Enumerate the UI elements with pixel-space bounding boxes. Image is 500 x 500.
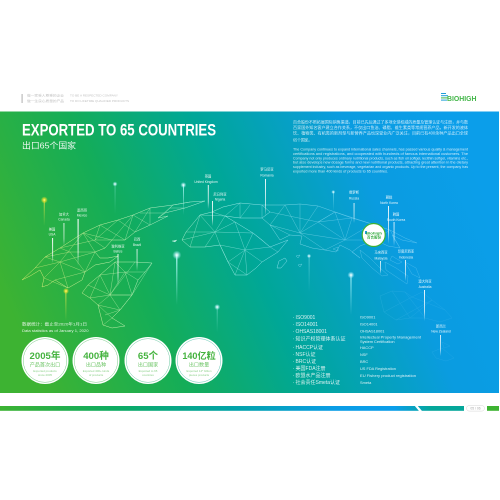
Chinese certifications: · HACCP认证 — [292, 344, 323, 351]
heading: exported to 65 countries — [22, 122, 216, 150]
English certifications: ISO9001 — [360, 314, 375, 320]
stat: 2005: Exported products — [33, 369, 57, 373]
country pins and labels: 加拿大 — [59, 212, 70, 216]
stat: 400: 400种 — [83, 350, 109, 362]
Chinese certifications: · 欧盟水产品注册 — [292, 372, 331, 379]
English certifications: Intellectual Property Management — [360, 335, 422, 340]
country pins and labels: New Zealand — [431, 330, 451, 334]
heading: exported to 65 countries: 出口65个国家 — [22, 140, 77, 150]
stat: 2005: since 2005 — [38, 373, 52, 377]
country pins and labels: Belize — [114, 250, 123, 254]
English certifications: EU Fishery product registration — [360, 373, 416, 378]
header slogan: TO DO LIFETIME QUALIFIED PRODUCTS — [70, 99, 129, 103]
country pins and labels: North Korea — [380, 201, 398, 205]
country pins and labels: Russia — [349, 196, 359, 200]
country pins and labels: United Kingdom — [194, 180, 218, 184]
world map wireframe — [22, 201, 454, 361]
company description: 百合股份不断拓展国际销售渠道，目前已先后通过了多项全球权威的质量及管理认证与注册，并与数 — [293, 118, 468, 124]
page number: 05 / 06 — [470, 407, 481, 411]
Chinese certifications: · OHSAS18001 — [292, 329, 327, 335]
stat: 400: Exported 400+ kinds — [83, 369, 110, 373]
stat: 2005: 2005年 — [30, 350, 61, 362]
country pins and labels: 新西兰 — [436, 324, 447, 328]
company description: supplement industry, such as beverage, vegetarian and organic products. Up to the present, the company has — [293, 165, 468, 169]
South America — [82, 262, 152, 328]
company description: 65个国家。 — [293, 136, 312, 142]
data statistics date: 数据统计：截止至2020年1月1日 — [22, 322, 87, 326]
data statistics date — [22, 322, 89, 333]
country pins and labels: 韩国 — [393, 212, 399, 216]
English certifications: US FDA Registration — [360, 366, 396, 371]
company description: 百家国外知名客户建立合作关系，不仅出口鱼油、磷脂、维生素类等常规营养产品，新开发的液体 — [293, 124, 468, 130]
stat: 65: 65个 — [138, 351, 159, 362]
English certifications: System Certification — [360, 339, 395, 344]
company description — [293, 118, 468, 174]
company description: but also develops new dosage forms and new nutritional products, attracting great attention in the dietary — [293, 161, 468, 165]
heading: exported to 65 countries: EXPORTED TO 65 COUNTRIES — [22, 122, 216, 140]
country pins and labels: 英国 — [205, 174, 211, 178]
certification list — [292, 314, 422, 386]
country pins and labels — [49, 166, 451, 356]
logo: Biohigh: BIOHIGH — [447, 96, 476, 103]
English certifications: NSF — [360, 352, 368, 357]
stat: 2005: 产品首次出口 — [30, 362, 60, 368]
stat: 14 billion: 140亿粒 — [182, 350, 216, 361]
stat: 65: 出口国家 — [138, 362, 158, 368]
country pins and labels: Australia — [419, 285, 432, 289]
country pins and labels: 俄罗斯 — [349, 190, 360, 194]
stat: 2005 — [22, 337, 68, 384]
country pins and labels: South Korea — [387, 218, 405, 222]
English certifications: Smeta — [360, 380, 372, 385]
Asia — [262, 204, 420, 284]
header slogan — [22, 93, 129, 103]
footer band — [0, 405, 499, 411]
English certifications: BRC — [360, 359, 368, 364]
country pins and labels: 尼日利亚 — [213, 192, 227, 196]
header slogan: 做一生良心质量的产品 — [27, 98, 64, 103]
country pins and labels: 马来西亚 — [374, 250, 388, 254]
stat: 14 billion: 出口数量 — [189, 362, 209, 368]
stat: 14 billion: pieces products — [189, 373, 210, 377]
country pins and labels: Malaysia — [374, 256, 388, 260]
country pins and labels: Romania — [260, 174, 274, 178]
stat: 65 — [124, 337, 172, 384]
country pins and labels: USA — [49, 232, 56, 236]
glowing beacons — [41, 182, 355, 332]
badge: Biohigh China headquarters: Biohigh — [366, 232, 382, 236]
English certifications: ISO14001 — [360, 322, 378, 326]
country pins and labels: 墨西哥 — [77, 208, 88, 212]
page number — [466, 406, 484, 411]
Africa and Europe — [172, 203, 288, 275]
Australia and New Zealand — [380, 291, 454, 361]
stat: 400: of products — [89, 373, 104, 377]
country pins and labels: Mexico — [77, 214, 87, 218]
stat circles — [22, 337, 222, 384]
panel: green to blue background — [0, 112, 499, 393]
country pins and labels: 印度尼西亚 — [398, 248, 415, 254]
company description: exported more than 400 kinds of products to 65 countries. — [293, 170, 388, 174]
badge: Biohigh China headquarters: 百合股份 — [367, 234, 382, 240]
stat: 400 — [72, 337, 120, 384]
country pins and labels: 玻利维亚 — [111, 244, 125, 248]
stat: 14 billion — [176, 337, 222, 384]
country pins and labels: 美国 — [49, 226, 55, 232]
stat: 14 billion: Exported 14* billion — [187, 369, 212, 373]
company description: Company not only produces ordinary nutritional products, such as fish oil softgel, lecithin softgel, vitamins etc., — [293, 156, 468, 160]
country pins and labels: Canada — [58, 218, 70, 222]
Chinese certifications — [292, 315, 346, 386]
country pins and labels: 罗马尼亚 — [260, 166, 274, 172]
stat: 65: Exported to 65 — [139, 369, 158, 373]
Chinese certifications: · NSF认证 — [292, 351, 316, 358]
English certifications: HACCP — [360, 345, 374, 350]
country pins and labels: 巴西 — [134, 238, 141, 242]
country pins and labels: 澳大利亚 — [418, 278, 432, 284]
company description: certifications and registrations, and cooperated with hundreds of famous international customers. The — [293, 152, 468, 156]
logo: Biohigh — [441, 93, 476, 103]
North America — [22, 201, 205, 288]
English certifications — [360, 314, 422, 385]
English certifications: OHSAS18001 — [360, 328, 384, 334]
company description: The Company continues to expand international sales channels, has passed various quality & management — [293, 148, 468, 152]
country pins and labels: Indonesia — [399, 256, 413, 260]
country pins and labels: Brazil — [133, 243, 141, 247]
Chinese certifications: · ISO9001 — [292, 315, 316, 321]
country pins and labels: Nigeria — [215, 198, 225, 202]
country pins and labels: 朝鲜 — [386, 194, 393, 200]
data statistics date: Data statistics as of January 1, 2020 — [22, 328, 89, 333]
stat: 65: countries — [142, 373, 154, 377]
header slogan: 做一家受人尊重的企业 — [27, 93, 64, 98]
stat: 400: 出口品种 — [86, 362, 106, 368]
badge: Biohigh China headquarters — [362, 224, 385, 246]
Chinese certifications: · BRC认证 — [292, 358, 316, 365]
header slogan: TO BE A RESPECTED COMPANY — [70, 94, 118, 98]
Chinese certifications: · ISO14001 — [292, 322, 318, 328]
Chinese certifications: · 知识产权管理体系认证 — [292, 336, 346, 343]
Chinese certifications: · 社会责任Smeta认证 — [292, 379, 340, 386]
company description: 饮、植物类、有机类的新剂型与新营养产品也深受业内广泛关注，目前已有400余种产品出口全球 — [293, 130, 468, 136]
Chinese certifications: · 美国FDA注册 — [292, 365, 326, 372]
